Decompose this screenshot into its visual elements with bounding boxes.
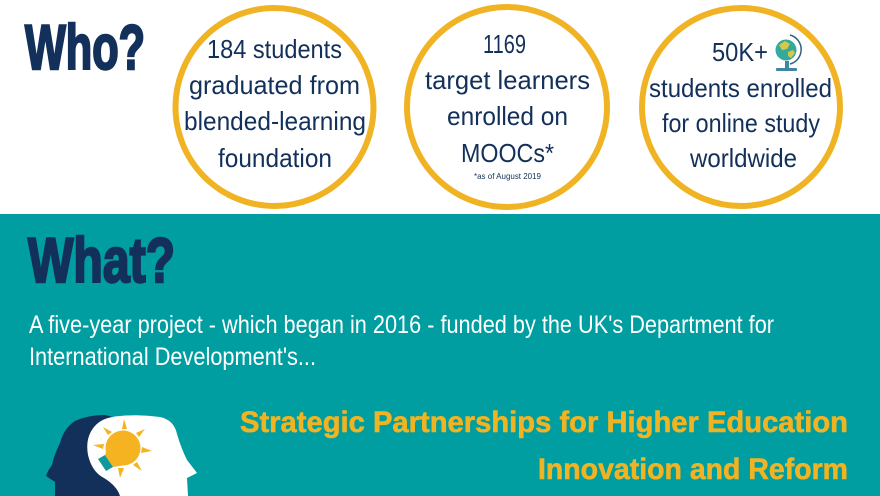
stat circle: 184 students xyxy=(176,8,374,206)
stat circle: 50K+ students: students enrolled xyxy=(649,73,832,103)
stat circle: 1169 target learners: 1169 xyxy=(483,29,526,59)
panel: what xyxy=(0,214,880,496)
stat circle: 184 students: foundation xyxy=(218,143,332,173)
icon: heads with light bulb xyxy=(46,415,197,496)
panel: who xyxy=(0,0,880,214)
stat circle: 50K+ students: for online study xyxy=(662,108,820,138)
body text xyxy=(29,311,774,371)
stat circle: 50K+ students xyxy=(642,8,840,206)
stat circle: 184 students: graduated from xyxy=(189,70,360,100)
heading: Who?: Who? xyxy=(25,13,145,83)
stat circle: 1169 target learners xyxy=(407,7,607,207)
stat circle: 1169 target learners: *as of August 2019 xyxy=(474,172,542,181)
stat circle: 1169 target learners: MOOCs* xyxy=(461,138,554,168)
stat circle: 1169 target learners: target learners xyxy=(425,65,590,95)
heading: What?: What? xyxy=(28,226,175,296)
body text: International Development's... xyxy=(29,343,316,371)
stat circle: 1169 target learners: enrolled on xyxy=(447,101,568,131)
programme name: Strategic Partnerships for Higher Education xyxy=(240,406,848,439)
stat circle: 184 students: 184 students xyxy=(207,34,342,64)
programme name: Innovation and Reform xyxy=(538,453,848,486)
body text: A five-year project - which began in 2016 - funded by the UK's Department for xyxy=(29,311,774,339)
light bulb xyxy=(93,419,152,478)
icon: globe xyxy=(776,35,801,71)
stat circle: 50K+ students: 50K+ xyxy=(712,37,768,67)
stat circle: 50K+ students: worldwide xyxy=(689,143,797,173)
stat circle: 184 students: blended-learning xyxy=(184,106,366,136)
programme name xyxy=(240,406,848,486)
